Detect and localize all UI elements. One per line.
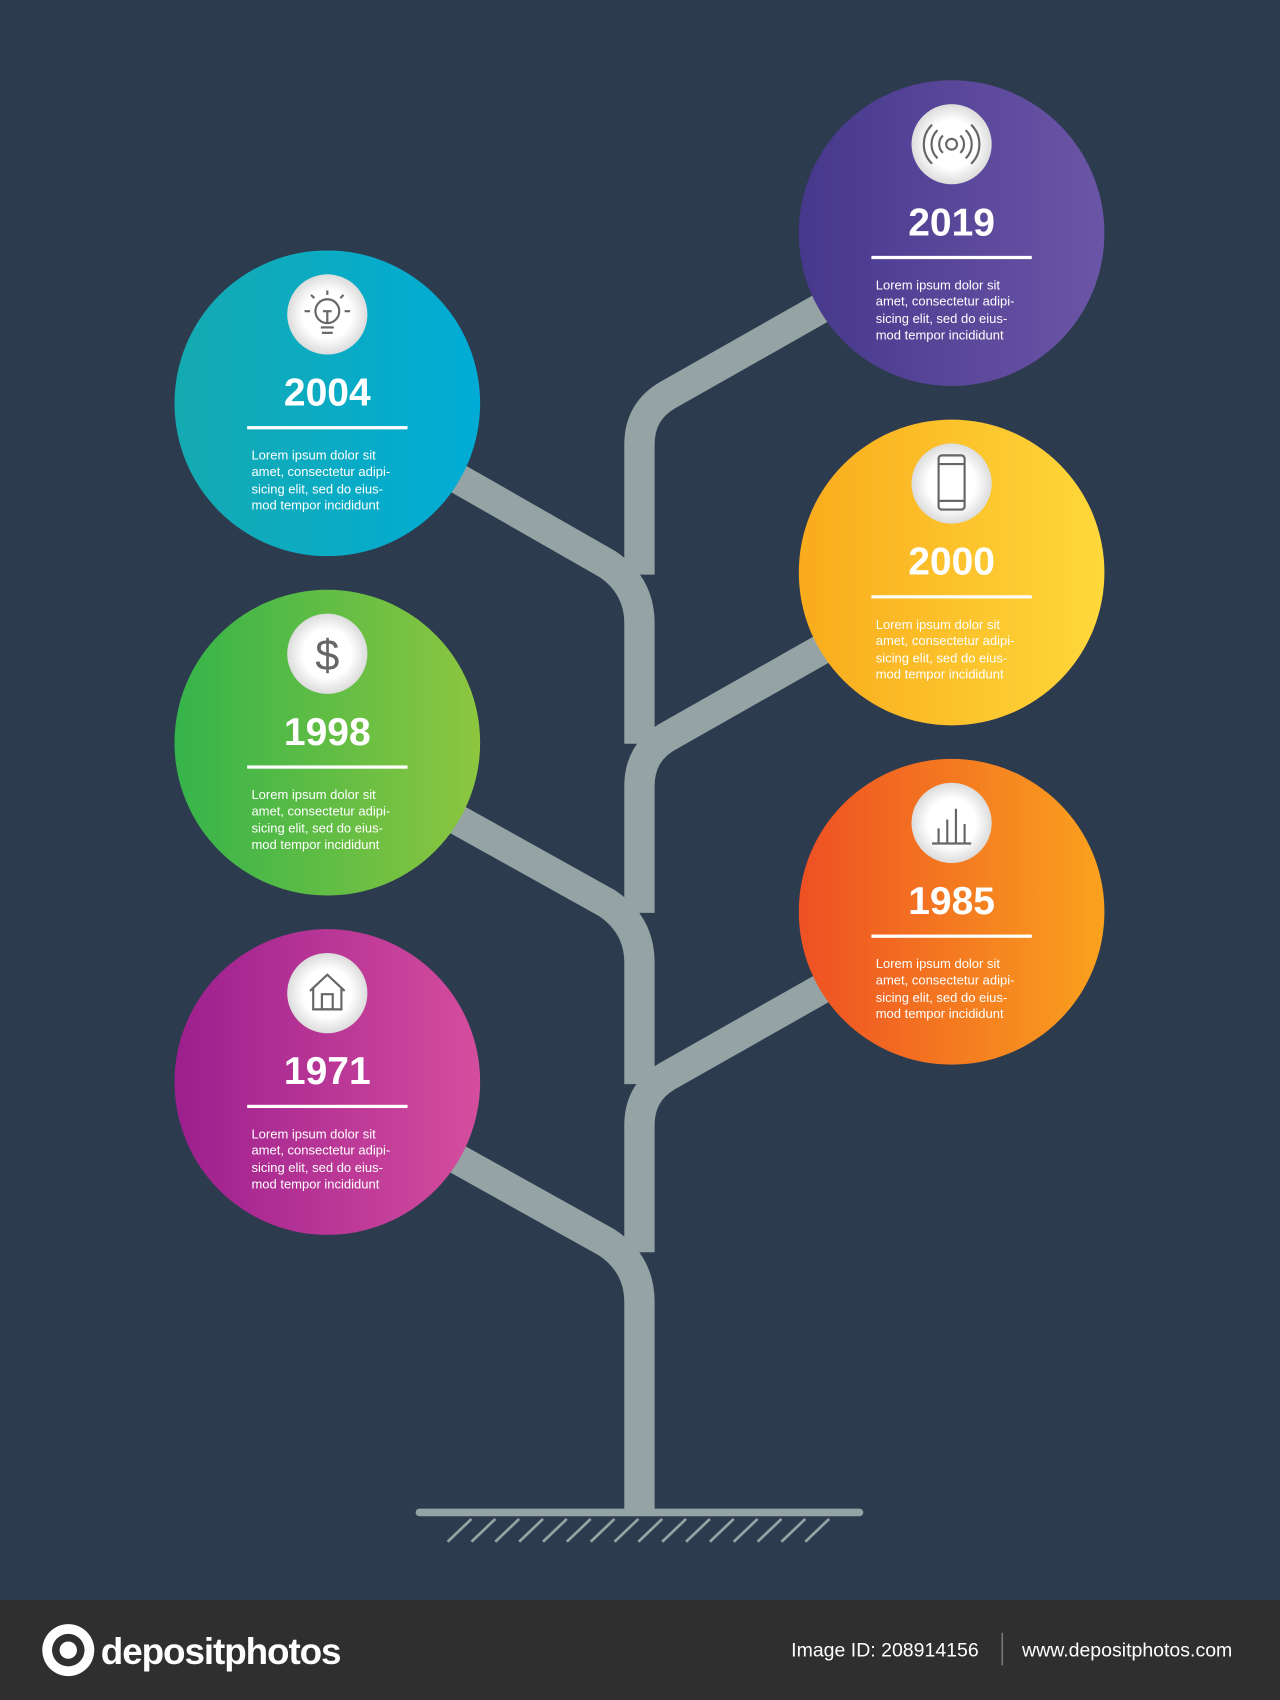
panel: 2019: 2019 xyxy=(908,201,995,244)
panel: 2019: Lorem ipsum dolor sit xyxy=(876,277,1000,292)
panel: 1998 xyxy=(174,590,480,896)
panel: 2019: amet, consectetur adipi- xyxy=(876,294,1014,309)
panel: 2000 xyxy=(799,420,1104,725)
tree trunk and branches xyxy=(455,304,829,1512)
footer bar xyxy=(0,1600,1280,1700)
panel: 1971: amet, consectetur adipi- xyxy=(251,1143,390,1158)
panel: 1971: Lorem ipsum dolor sit xyxy=(251,1126,376,1141)
footer image id: Image ID: 208914156 xyxy=(791,1640,979,1662)
panel: 2019: mod tempor incididunt xyxy=(876,327,1004,342)
panel: 1998: sicing elit, sed do eius- xyxy=(251,821,383,836)
panel: 1985: sicing elit, sed do eius- xyxy=(876,990,1007,1005)
panel: 2019: sicing elit, sed do eius- xyxy=(876,311,1007,326)
footer url: www.depositphotos.com xyxy=(1021,1640,1232,1662)
panel: 1985: amet, consectetur adipi- xyxy=(876,972,1014,987)
panel: 2004 xyxy=(174,250,480,556)
panel: 2000: sicing elit, sed do eius- xyxy=(876,650,1007,665)
panel: 1998: $ xyxy=(315,632,339,680)
footer logo xyxy=(42,1624,340,1676)
panel: 2004: Lorem ipsum dolor sit xyxy=(251,448,376,463)
panel: 2000: amet, consectetur adipi- xyxy=(876,633,1014,648)
panel: 1971: 1971 xyxy=(284,1050,371,1093)
panel: 1971: sicing elit, sed do eius- xyxy=(251,1160,383,1175)
panel: 1998: 1998 xyxy=(284,711,371,754)
panel: 2019 xyxy=(799,80,1104,386)
panel: 1971 xyxy=(174,929,480,1235)
panel: 2004: 2004 xyxy=(284,371,371,414)
panel: 1985: mod tempor incididunt xyxy=(876,1006,1004,1021)
footer logo: depositphotos xyxy=(101,1631,340,1672)
panel: 1985: 1985 xyxy=(908,880,995,923)
panel: 1971: mod tempor incididunt xyxy=(251,1176,380,1191)
panel: 1998: mod tempor incididunt xyxy=(251,837,380,852)
panel: 2000: mod tempor incididunt xyxy=(876,667,1004,682)
panel: 1985: Lorem ipsum dolor sit xyxy=(876,956,1000,971)
ground xyxy=(419,1512,859,1542)
panel: 1985 xyxy=(799,759,1104,1065)
panel: 1998: Lorem ipsum dolor sit xyxy=(251,787,376,802)
panel: 1998: amet, consectetur adipi- xyxy=(251,803,390,818)
panel: 2004: sicing elit, sed do eius- xyxy=(251,481,383,496)
panel: 2000: 2000 xyxy=(908,541,995,584)
panel: 2004: amet, consectetur adipi- xyxy=(251,464,390,479)
panel: 2000: Lorem ipsum dolor sit xyxy=(876,617,1000,632)
panel: 2004: mod tempor incididunt xyxy=(251,498,380,513)
